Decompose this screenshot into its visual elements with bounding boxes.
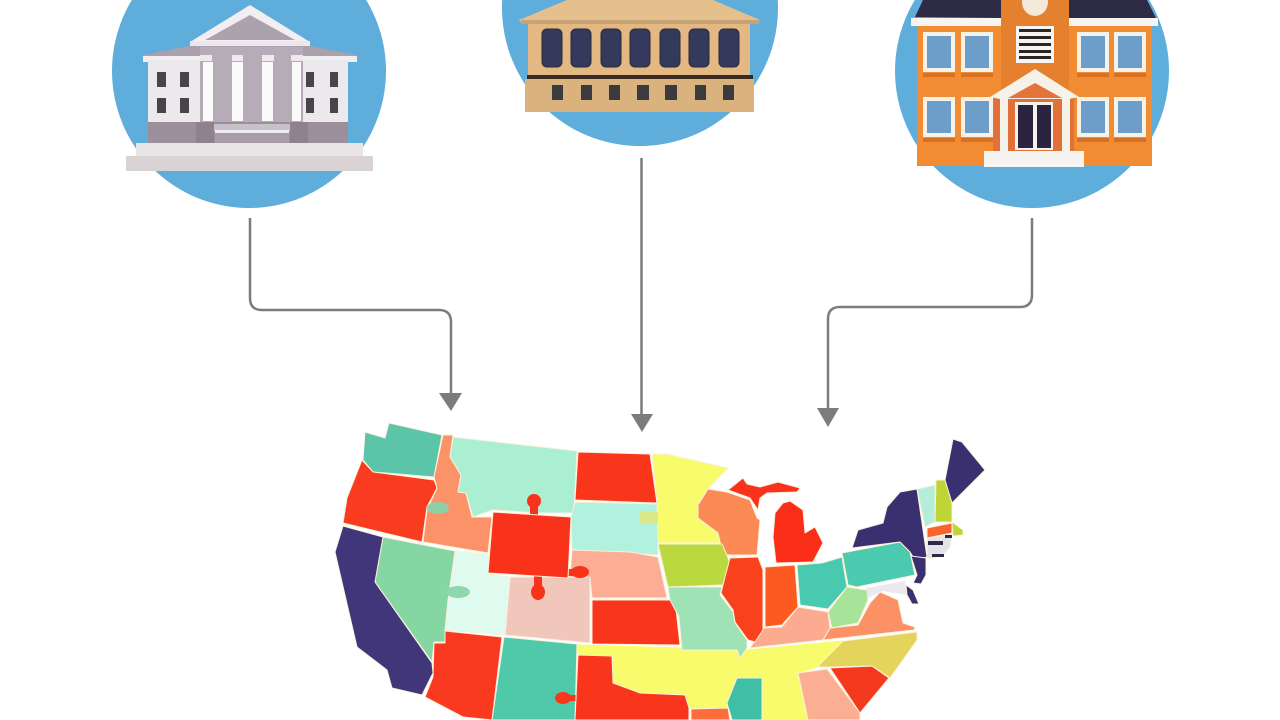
puzzle tab: Oregon and Idaho border	[427, 502, 449, 514]
region: Oklahoma, Arkansas, Tennessee and Alabama	[578, 641, 843, 720]
arrow: federal building to map	[250, 218, 462, 411]
state: Vermont	[917, 485, 935, 527]
state: New Mexico	[492, 637, 577, 720]
state: Cape Cod	[952, 522, 963, 536]
state: Kansas	[592, 600, 680, 645]
state: Nevada	[375, 537, 455, 662]
state: Mississippi	[727, 678, 762, 720]
state: Maryland	[866, 581, 908, 598]
icon: federal building in circle	[112, 0, 386, 208]
state: West Virginia	[828, 587, 868, 628]
state: New York	[852, 489, 927, 560]
arrow: capitol building to map	[631, 158, 653, 432]
state: Ohio	[797, 557, 847, 609]
state: Wyoming	[488, 494, 589, 600]
icon: school building in circle	[895, 0, 1169, 208]
state: Maine	[945, 439, 985, 503]
state: Michigan upper peninsula	[728, 478, 800, 510]
state: Utah	[445, 551, 510, 635]
arrow: school building to map	[817, 218, 1032, 427]
state: Texas	[555, 655, 689, 720]
state: Georgia	[798, 669, 860, 720]
state: Idaho	[423, 435, 492, 553]
state: South Dakota	[571, 502, 658, 555]
state: Indiana	[765, 565, 798, 627]
state: Washington	[363, 423, 442, 477]
state: California	[335, 526, 433, 695]
state: Delmarva	[906, 585, 919, 604]
state: New Jersey	[911, 556, 926, 584]
state: North Dakota	[575, 452, 657, 503]
state: Arizona	[425, 631, 502, 720]
state: Colorado	[505, 577, 590, 643]
state: Illinois	[721, 557, 763, 642]
state: South Carolina	[830, 666, 889, 713]
puzzle tab: South Dakota and Minnesota border	[640, 512, 658, 524]
icon: capitol building in circle	[502, 0, 778, 146]
state: Nebraska	[570, 550, 667, 598]
state: Virginia	[823, 592, 915, 640]
state: North Carolina	[817, 632, 917, 678]
state: Pennsylvania	[842, 542, 915, 587]
state: Minnesota	[652, 454, 728, 543]
state: Kentucky	[750, 607, 830, 648]
state: Missouri	[668, 587, 747, 658]
state: Massachusetts	[927, 523, 952, 538]
state: Montana	[450, 437, 577, 517]
state: Louisiana	[691, 708, 730, 720]
state: Oregon	[343, 460, 437, 542]
map of the United States	[335, 423, 985, 720]
state: Iowa	[658, 544, 732, 587]
state: Wisconsin	[698, 489, 760, 555]
state: Michigan lower peninsula	[773, 501, 823, 563]
puzzle tab: Nevada and Utah border	[446, 586, 470, 598]
state: New Hampshire	[935, 480, 952, 522]
state: Connecticut and Rhode Island	[927, 535, 952, 559]
